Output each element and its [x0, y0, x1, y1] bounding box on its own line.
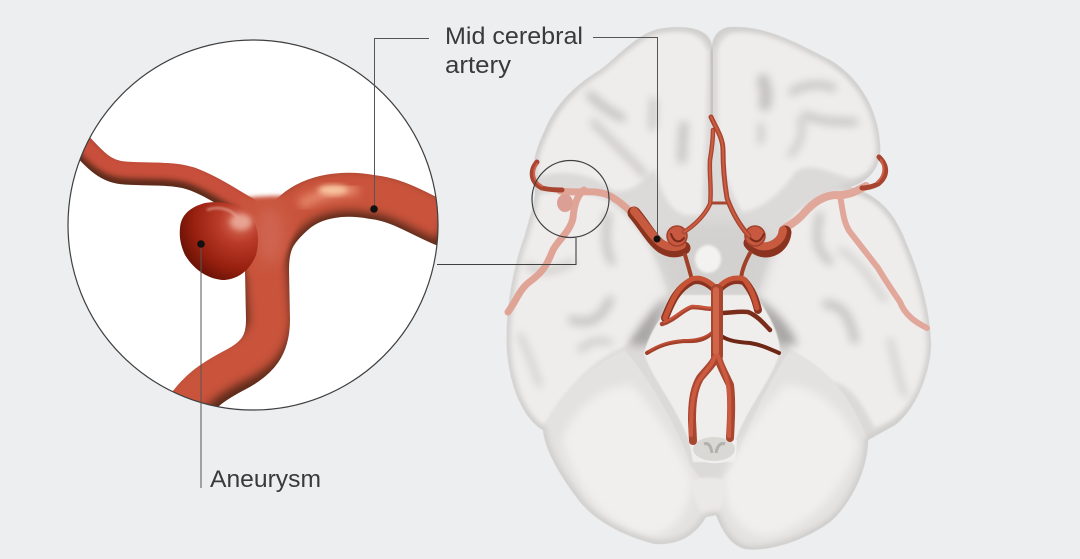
label: artery: artery [445, 52, 511, 79]
outer rim shading [507, 27, 931, 549]
anterior cerebral arteries [684, 117, 749, 236]
artery highlight [300, 190, 358, 205]
superior cerebellar arteries [662, 306, 770, 330]
branch body [75, 133, 250, 205]
leader line: circle to locator [437, 238, 576, 264]
spinal cord rim [706, 440, 737, 464]
artery body [178, 190, 445, 408]
right cerebellum [788, 356, 837, 389]
left curl [667, 226, 687, 246]
main artery [173, 172, 438, 406]
spinal cord section [693, 437, 737, 463]
cerebellum inner light surfaces [562, 385, 858, 536]
inferior cerebellar arteries [647, 330, 779, 353]
branch dark underside [80, 138, 255, 208]
leader line: mid cerebral artery in brain [593, 38, 660, 242]
leader line: aneurysm [197, 240, 205, 488]
magnified arteries [80, 138, 438, 406]
central hollow [662, 230, 775, 292]
left aneurysm small [557, 194, 573, 212]
leader dot [370, 205, 378, 213]
label: mid cerebral artery: Mid cerebral [445, 23, 583, 50]
arteries [532, 117, 886, 441]
brain lobes and folds [505, 27, 931, 549]
aneurysm pink highlight [230, 214, 252, 230]
posterior circle [665, 278, 758, 318]
mammillary body [695, 245, 721, 273]
leader dot [197, 240, 205, 248]
upper left branch [80, 138, 256, 210]
spinal cord core [693, 437, 735, 461]
aneurysm sac [180, 202, 258, 280]
right middle cerebral artery trunk [750, 230, 785, 251]
brain illustration [505, 27, 931, 549]
junction sheen [256, 207, 284, 263]
leader path [200, 244, 202, 488]
brainstem [644, 295, 780, 462]
temporal and frontal fold shadows [520, 80, 905, 395]
junction body [240, 196, 297, 275]
faded arteries behind lobes [508, 186, 927, 328]
magnified circle panel [60, 40, 450, 420]
left cerebellum [550, 354, 624, 427]
artery dark flank [246, 265, 254, 320]
left hook artery [532, 162, 562, 190]
small locator circle [532, 160, 609, 238]
leader path [374, 38, 429, 208]
aneurysm gloss [206, 206, 238, 218]
right frontal lobe [718, 31, 880, 212]
deep shadow beside brainstem [628, 295, 798, 345]
right temporal lobe [758, 192, 931, 428]
leader path [593, 38, 658, 238]
leader dot [654, 236, 660, 242]
posterior communicating arteries [685, 253, 750, 280]
left temporal lobe [505, 192, 668, 428]
highlight spot [318, 185, 348, 195]
right faded artery [785, 186, 927, 328]
grey matter [704, 444, 725, 453]
brain base shape [507, 27, 931, 549]
leader line: mid cerebral artery in magnified circle [370, 38, 429, 213]
artery dark shadow [173, 172, 438, 406]
right hook artery [862, 157, 886, 188]
basilar and vertebral arteries [691, 290, 731, 441]
left frontal lobe [533, 30, 708, 215]
circle outline [68, 40, 438, 410]
label: aneurysm: Aneurysm [210, 466, 321, 493]
right curl [745, 226, 765, 246]
left faded artery [508, 190, 645, 312]
left middle cerebral artery trunk [634, 211, 684, 251]
fissure shadow [711, 48, 712, 118]
vermis [701, 478, 720, 513]
circle white fill [68, 40, 438, 410]
